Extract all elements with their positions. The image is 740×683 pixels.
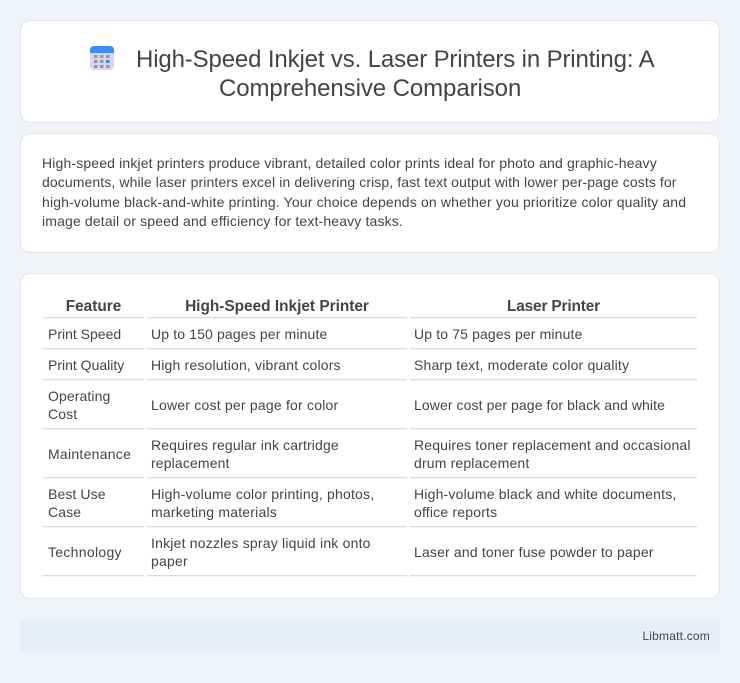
intro text: documents, while laser printers excel in delivering crisp, fast text output with lower per-page costs for xyxy=(42,174,677,190)
row: print quality: Print Quality xyxy=(48,357,124,373)
column headers xyxy=(66,298,600,315)
panel: comparison table xyxy=(20,273,720,599)
intro text: image detail or speed and efficiency for text-heavy tasks. xyxy=(42,213,403,229)
row: operating cost: Lower cost per page for color xyxy=(151,397,338,413)
row: technology xyxy=(48,535,654,569)
row: maintenance: replacement xyxy=(151,455,230,471)
row: maintenance: Maintenance xyxy=(48,446,131,462)
row: best use case: office reports xyxy=(414,504,497,520)
row: print speed xyxy=(48,326,582,342)
row: operating cost: Lower cost per page for black and white xyxy=(414,397,665,413)
row: maintenance: Requires regular ink cartridge xyxy=(151,437,339,453)
row: maintenance: drum replacement xyxy=(414,455,529,471)
row: best use case: Case xyxy=(48,504,81,520)
row: maintenance xyxy=(48,437,691,471)
row: operating cost: Operating xyxy=(48,388,110,404)
footer credit: Libmatt.com xyxy=(642,629,710,643)
row: print speed: Print Speed xyxy=(48,326,121,342)
column headers: High-Speed Inkjet Printer xyxy=(185,298,369,315)
intro text: High-speed inkjet printers produce vibrant, detailed color prints ideal for photo and graphic-heavy xyxy=(42,154,657,170)
title: Comprehensive Comparison xyxy=(219,75,521,102)
row: operating cost xyxy=(48,388,665,422)
row: maintenance: Requires toner replacement and occasional xyxy=(414,437,691,453)
title: High-Speed Inkjet vs. Laser Printers in Printing: A xyxy=(136,46,654,73)
row: operating cost: Cost xyxy=(48,406,77,422)
row: best use case: High-volume black and white documents, xyxy=(414,486,676,502)
column headers: Laser Printer xyxy=(507,298,600,315)
row: print quality: Sharp text, moderate color quality xyxy=(414,357,629,373)
panel: title card xyxy=(20,20,720,123)
row: technology: Inkjet nozzles spray liquid ink onto xyxy=(151,535,371,551)
row: best use case: Best Use xyxy=(48,486,106,502)
title xyxy=(136,46,654,102)
row: print speed: Up to 75 pages per minute xyxy=(414,326,582,342)
panel: introduction xyxy=(20,133,720,253)
row: best use case: High-volume color printing, photos, xyxy=(151,486,374,502)
row: print speed: Up to 150 pages per minute xyxy=(151,326,327,342)
row: print quality xyxy=(48,357,629,373)
row: technology: paper xyxy=(151,553,188,569)
icon: calendar xyxy=(90,46,114,70)
row: technology: Technology xyxy=(48,544,122,560)
row: best use case: marketing materials xyxy=(151,504,277,520)
comparison table xyxy=(43,298,697,577)
row: best use case xyxy=(48,486,676,520)
row: print quality: High resolution, vibrant colors xyxy=(151,357,341,373)
row: technology: Laser and toner fuse powder to paper xyxy=(414,544,654,560)
intro text xyxy=(42,154,686,229)
column headers: Feature xyxy=(66,298,121,315)
footer xyxy=(20,619,720,653)
intro text: high-volume black-and-white printing. Your choice depends on whether you prioritize color quality and xyxy=(42,194,686,210)
